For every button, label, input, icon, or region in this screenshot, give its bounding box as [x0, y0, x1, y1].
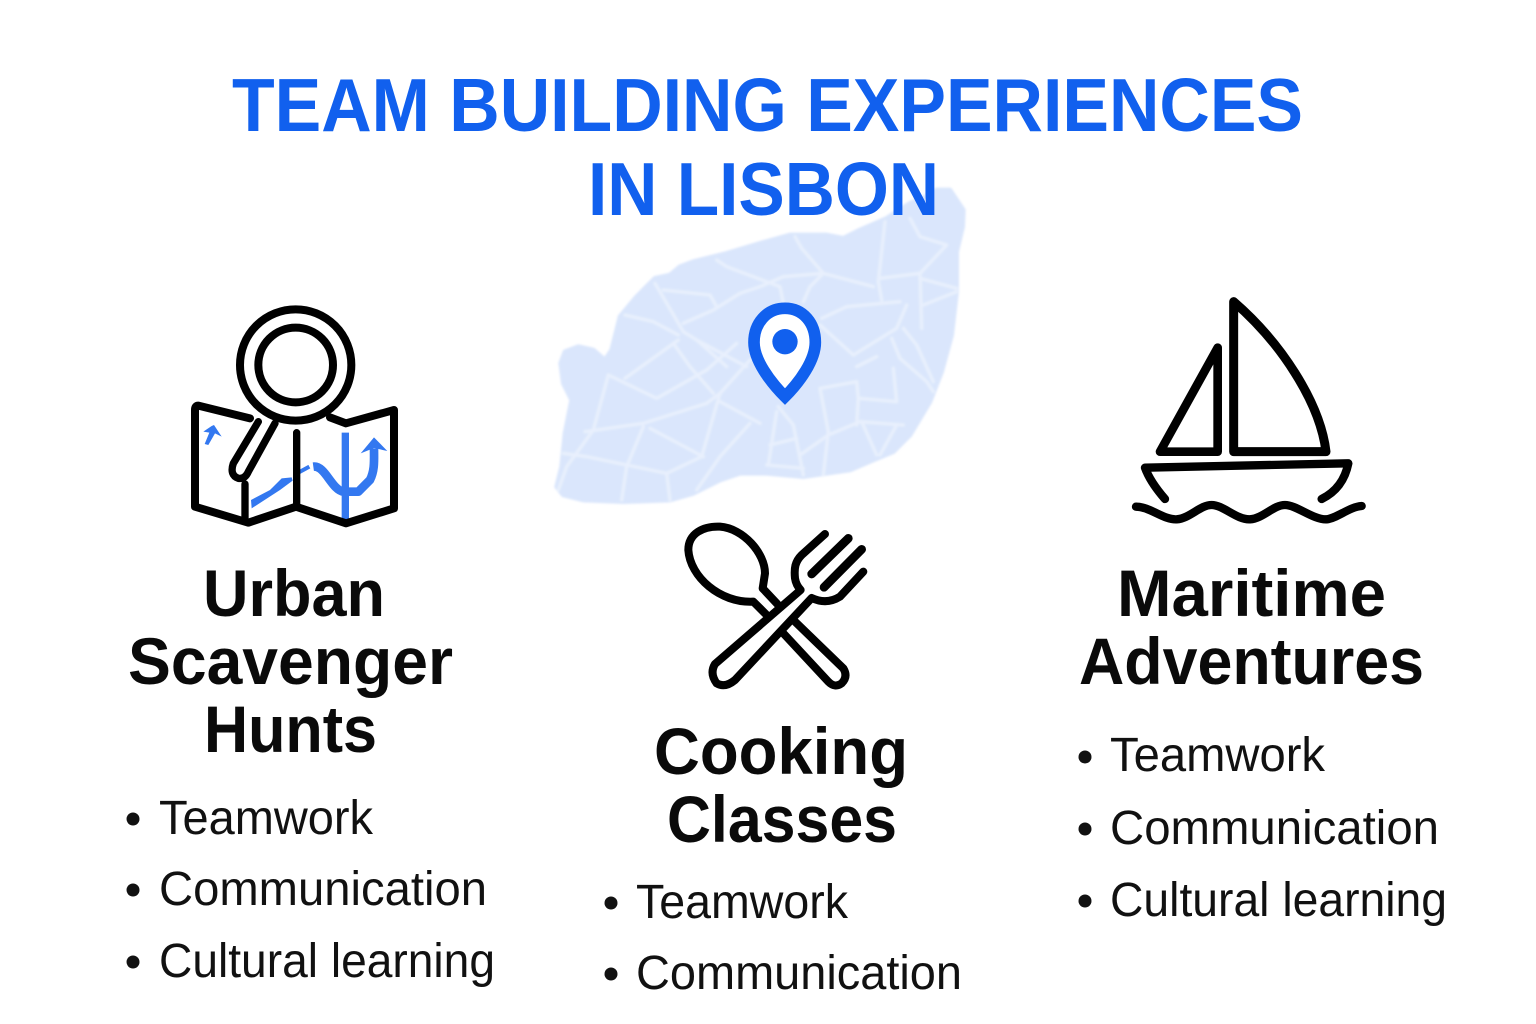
heading: cooking classes: Classes: [667, 782, 897, 856]
bullet list: maritime adventures: Communication: [1110, 802, 1439, 855]
bullet list: urban scavenger hunts: Communication: [159, 863, 487, 916]
heading: urban scavenger hunts: Scavenger: [128, 624, 453, 698]
bullet list: maritime adventures: Teamwork: [1110, 729, 1326, 782]
heading: maritime adventures: [1079, 556, 1424, 698]
heading: urban scavenger hunts: [128, 556, 453, 766]
map of Lisbon with location pin: [557, 190, 963, 502]
bullet list: urban scavenger hunts: [126, 792, 495, 988]
panel: cooking classes: [604, 527, 962, 1000]
panel: urban scavenger hunts: [126, 309, 495, 988]
heading: urban scavenger hunts: Urban: [203, 556, 385, 630]
map silhouette with streets: [557, 190, 963, 502]
bullet list: maritime adventures: Cultural learning: [1110, 874, 1447, 927]
bullet list: urban scavenger hunts: Cultural learning: [159, 935, 495, 988]
heading: maritime adventures: Maritime: [1117, 556, 1386, 630]
bullet list: cooking classes: [604, 876, 962, 1000]
location pin: [754, 308, 815, 397]
panel: maritime adventures: [1078, 302, 1447, 927]
icon: crossed spoon and fork: [688, 527, 863, 685]
bullet list: urban scavenger hunts: Teamwork: [159, 792, 374, 845]
icon: map with magnifying glass: [195, 309, 394, 523]
title: [232, 63, 1303, 231]
title: TEAM BUILDING EXPERIENCES: [232, 63, 1303, 147]
icon: sailboat: [1136, 302, 1362, 519]
bullet list: cooking classes: Teamwork: [636, 876, 849, 929]
heading: cooking classes: Cooking: [654, 714, 908, 788]
heading: maritime adventures: Adventures: [1079, 624, 1424, 698]
bullet list: cooking classes: Communication: [636, 947, 962, 1000]
title: IN LISBON: [588, 147, 939, 231]
bullet list: maritime adventures: [1078, 729, 1447, 927]
heading: cooking classes: [654, 714, 908, 856]
heading: urban scavenger hunts: Hunts: [204, 692, 377, 766]
